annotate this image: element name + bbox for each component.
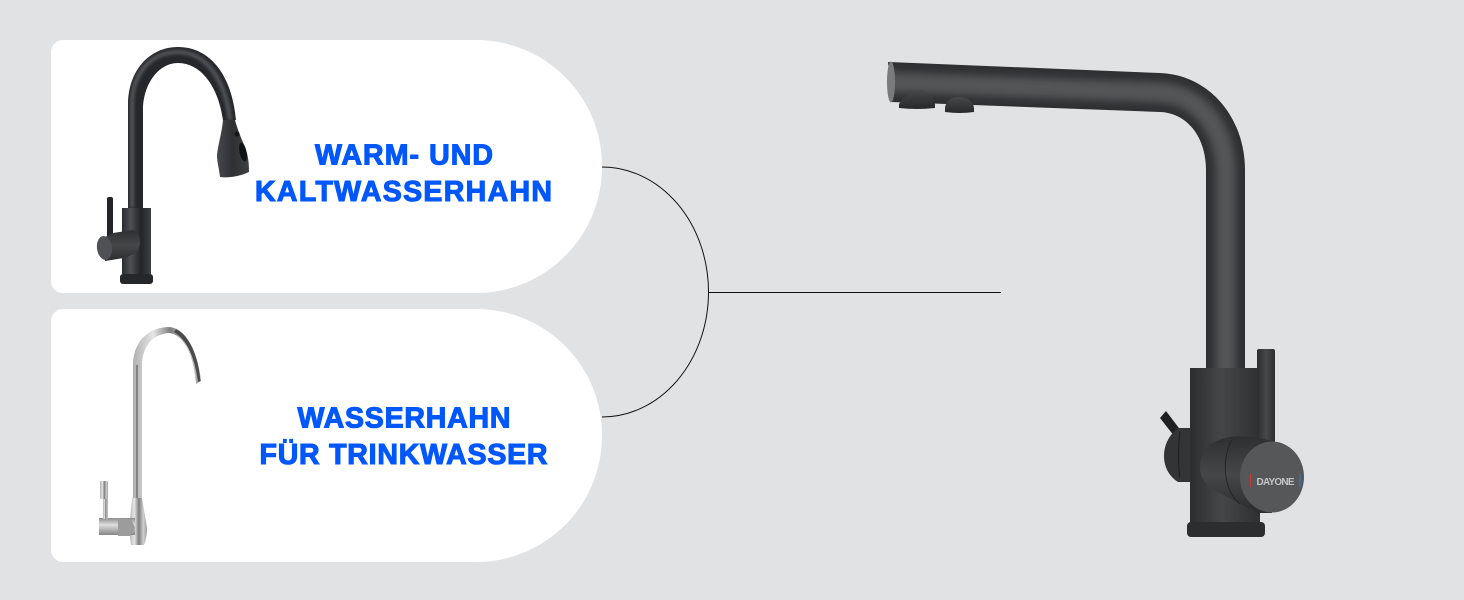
foot: [1187, 522, 1265, 537]
icon: main black faucet: [880, 55, 1304, 537]
body: [1190, 368, 1260, 524]
side lever: [1160, 411, 1185, 441]
spout: [880, 55, 1250, 380]
cylinder: [1200, 436, 1272, 513]
aerators: [899, 90, 935, 109]
label: warm and cold tap: [255, 140, 552, 208]
lever: [1257, 349, 1275, 447]
spout end: [887, 62, 895, 102]
label: warm and cold tap: WARM- UND: [315, 140, 493, 172]
logo: [1250, 474, 1300, 488]
icon: black pull-down kitchen faucet: [95, 40, 249, 284]
left knob: [1164, 428, 1190, 482]
panel: drinking water tap: [51, 309, 602, 562]
panel: warm and cold water tap: [51, 40, 602, 293]
logo: DAYONE: [1256, 477, 1295, 488]
connector lines: [602, 167, 1001, 417]
label: drinking water tap: FÜR TRINKWASSER: [260, 439, 548, 471]
disc: [1240, 442, 1304, 512]
icon: stainless gooseneck faucet: [99, 327, 201, 545]
label: drinking water tap: WASSERHAHN: [298, 402, 510, 434]
label: drinking water tap: [260, 402, 548, 471]
label: warm and cold tap: KALTWASSERHAHN: [255, 176, 552, 208]
